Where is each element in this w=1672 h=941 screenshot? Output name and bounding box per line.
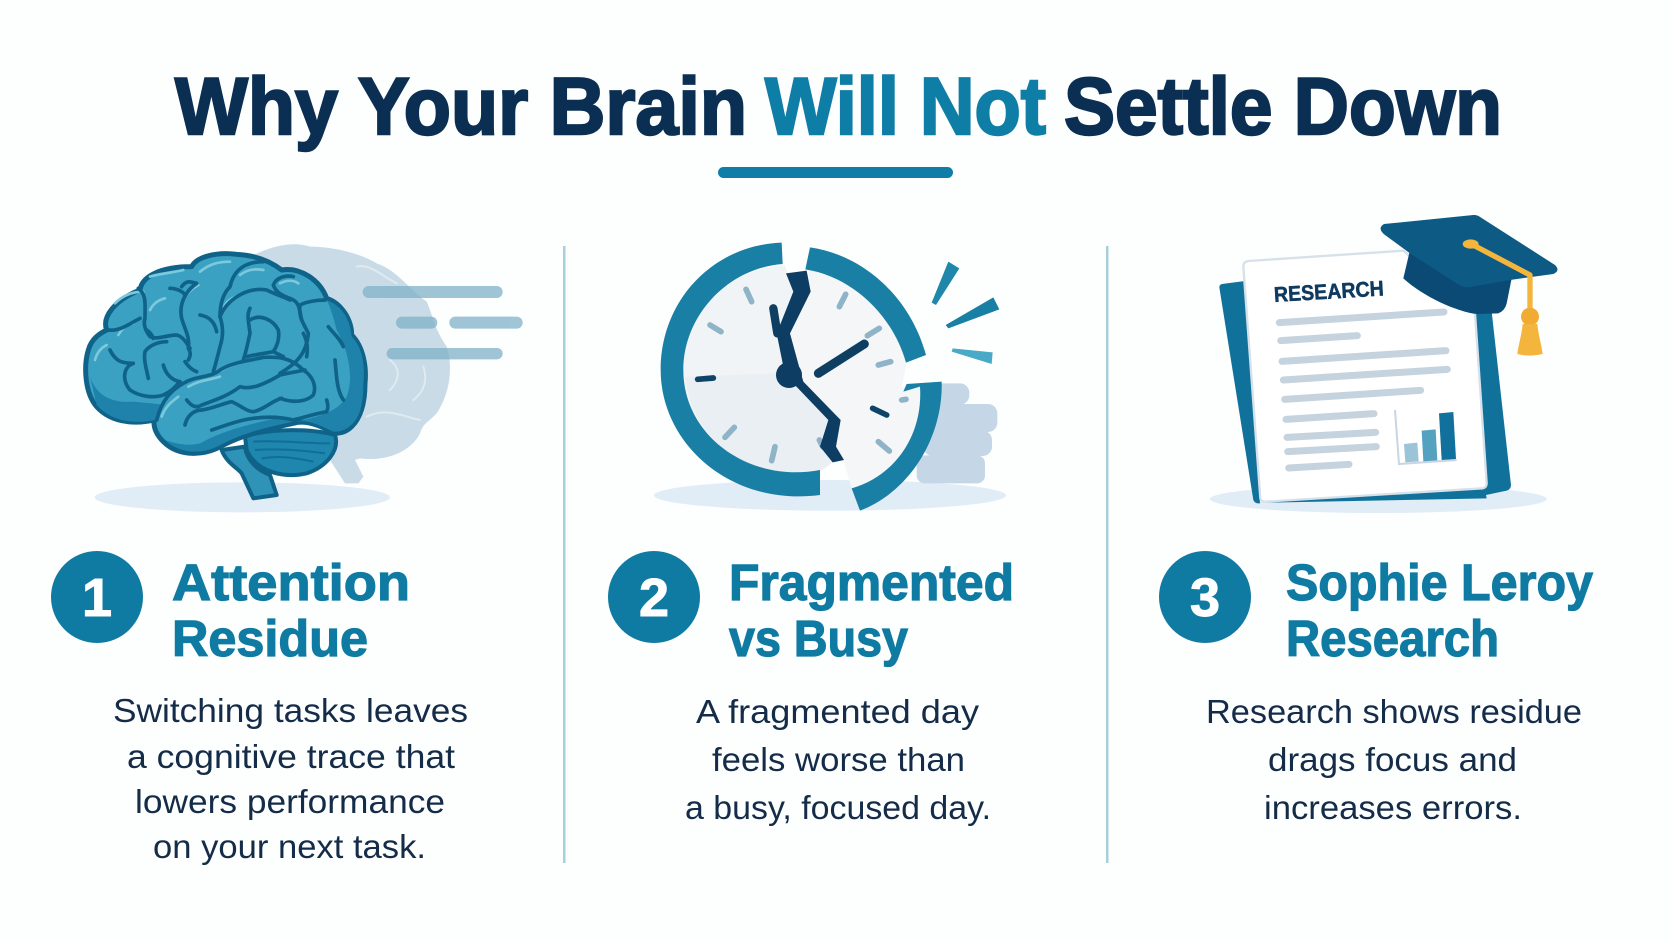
heading: sophie leroy research: Sophie Leroy — [1286, 554, 1594, 611]
text: attention residue description: a cognitive trace that — [127, 738, 455, 775]
panel: sophie leroy research — [1159, 215, 1594, 826]
heading: fragmented vs busy — [729, 554, 1014, 667]
icon: cerebellum — [245, 430, 336, 475]
text: fragmented description: A fragmented day — [696, 693, 980, 730]
text: attention residue description: on your next task. — [153, 828, 426, 865]
impact rays — [932, 262, 999, 364]
tick marks — [698, 289, 906, 461]
number badge 3: 3 — [1190, 568, 1220, 628]
panel: fragmented vs busy — [608, 243, 1014, 826]
heading: attention residue: Attention — [172, 554, 410, 611]
clock hands and crack — [773, 271, 864, 462]
icon: research paper and cap — [1210, 215, 1557, 513]
text: attention residue description: lowers performance — [135, 783, 445, 820]
icon: brain with motion ghost — [86, 244, 523, 512]
heading: sophie leroy research: Research — [1286, 610, 1499, 667]
number badge 1 — [51, 551, 143, 643]
title — [175, 62, 1502, 152]
text: research description: drags focus and — [1268, 741, 1517, 778]
number badge 2: 2 — [639, 568, 669, 628]
icon: cracked clock — [654, 243, 1006, 511]
icon: cerebrum — [86, 254, 365, 453]
text: fragmented description: feels worse than — [712, 741, 965, 778]
title underline — [718, 167, 953, 178]
research paper — [1243, 251, 1487, 502]
text: fragmented description — [685, 693, 991, 826]
text: research description: Research shows residue — [1206, 693, 1582, 730]
clock rim — [661, 243, 942, 511]
graduation cap — [1381, 215, 1557, 356]
heading: sophie leroy research — [1286, 554, 1594, 667]
icon: speed lines — [363, 286, 523, 359]
heading: fragmented vs busy: vs Busy — [729, 610, 909, 667]
clock face — [680, 265, 920, 488]
panel: attention residue — [51, 244, 523, 865]
heading: fragmented vs busy: Fragmented — [729, 554, 1014, 611]
title: Settle Down — [1064, 62, 1502, 152]
heading: attention residue: Residue — [172, 610, 368, 667]
title: Why Your Brain — [175, 62, 747, 152]
text: research description — [1206, 693, 1582, 826]
number badge 3 — [1159, 551, 1251, 643]
paper text lines — [1279, 312, 1447, 468]
paper heading: RESEARCH — [1273, 277, 1384, 307]
number badge 2 — [608, 551, 700, 643]
heading: attention residue — [172, 554, 410, 667]
text: attention residue description: Switching tasks leaves — [113, 692, 468, 729]
number badge 1: 1 — [82, 568, 112, 628]
text: research description: increases errors. — [1264, 789, 1522, 826]
title: Will Not — [765, 62, 1046, 152]
text: attention residue description — [113, 692, 468, 865]
mini bar chart — [1395, 410, 1457, 464]
icon: brain stem — [222, 447, 277, 498]
text: fragmented description: a busy, focused day. — [685, 789, 991, 826]
